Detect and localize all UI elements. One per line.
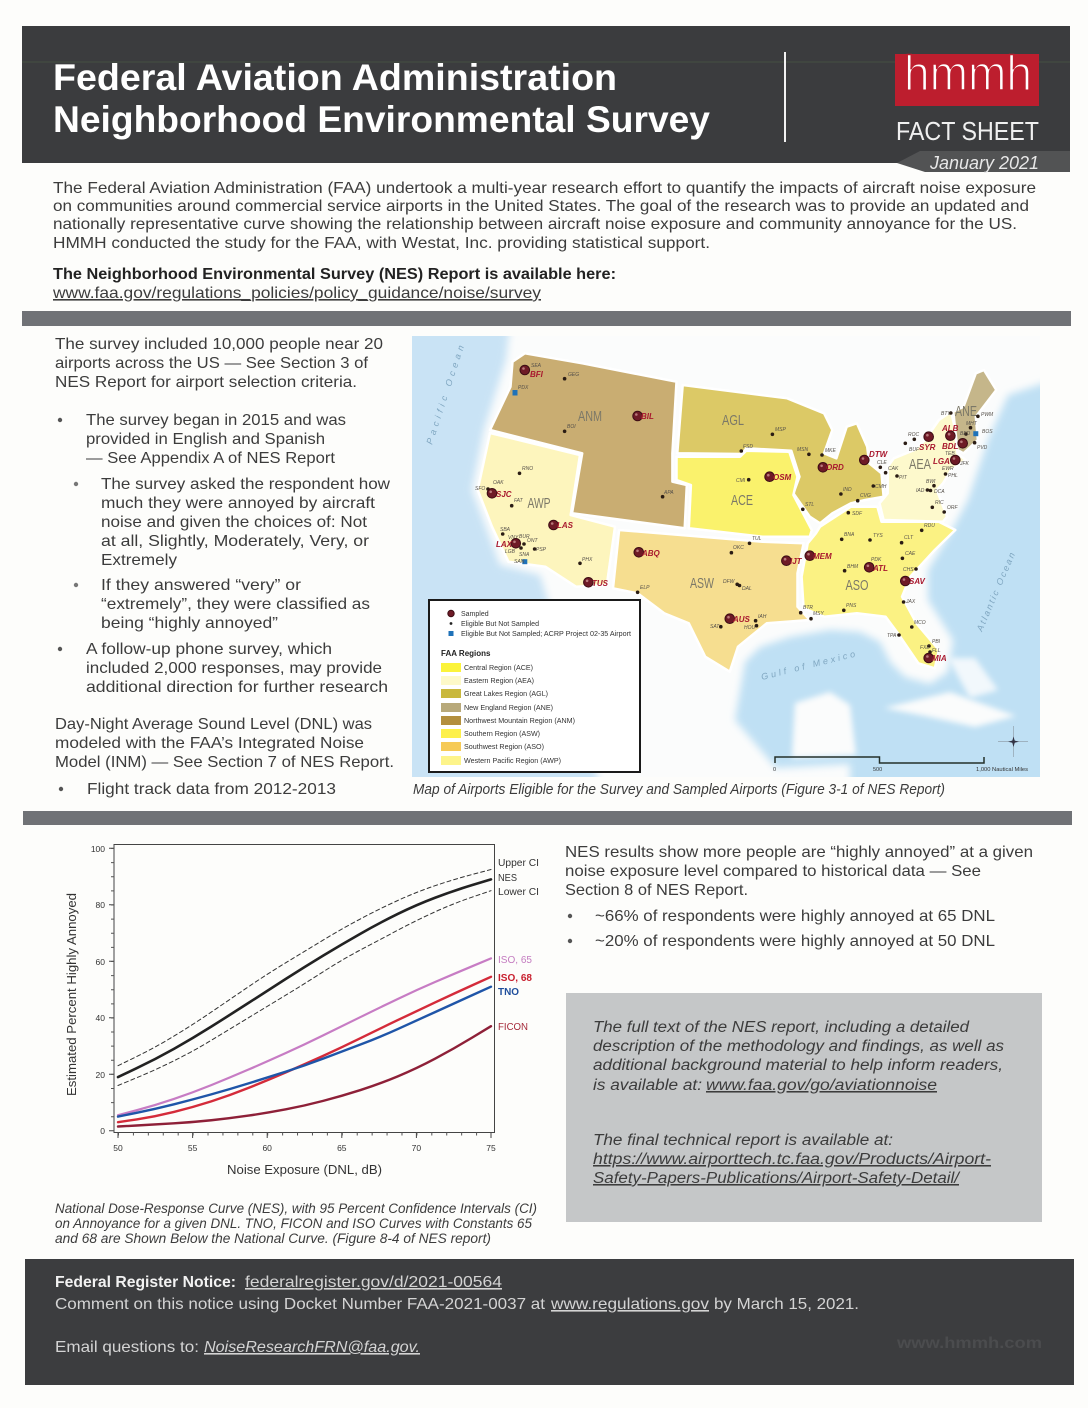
eligible airports: MCO [914, 620, 926, 626]
chart axes: 60 [96, 957, 105, 967]
legend: airport symbols: Eligible But Not Sampled; ACRP Project 02-35 Airport [461, 631, 631, 638]
region labels: ACE [731, 492, 753, 509]
eligible airports: EWR [942, 466, 954, 472]
panel: report links: The full text of the NES report, including a detailed [593, 1019, 970, 1036]
eligible airports: FLL [932, 648, 941, 654]
eligible airports: RDU [924, 523, 935, 529]
eligible airports: IND [843, 487, 852, 493]
curve labels: FICON [498, 1022, 528, 1033]
legend: FAA regions [441, 649, 575, 765]
chart axes: 60 [262, 1143, 272, 1153]
eligible airports: BHM [847, 564, 859, 570]
email contact: NoiseResearchFRN@faa.gov. [204, 1339, 420, 1356]
eligible airports: ROC [908, 432, 920, 438]
ocean labels: Atlantic Ocean [974, 549, 1018, 634]
federal register notice: Federal Register Notice: [55, 1274, 236, 1291]
comment instructions [55, 1296, 859, 1313]
eligible airports: MSY [813, 611, 824, 617]
region labels: ASO [846, 577, 868, 594]
eligible airports: FAT [514, 498, 524, 504]
sampled airports: LAX [496, 540, 513, 549]
curve: TNO [118, 987, 491, 1117]
panel: report links: description of the methodology and findings, as well as [593, 1038, 1004, 1055]
sampled airports: OSM [773, 473, 792, 482]
survey description text: — See Appendix A of NES Report [86, 450, 336, 467]
curve labels: TNO [498, 987, 519, 998]
sampled airports: SYR [919, 443, 936, 452]
legend: FAA regions: Northwest Mountain Region (ANM) [464, 718, 575, 725]
x-axis title: Noise Exposure (DNL, dB) [227, 1163, 382, 1177]
header banner [22, 26, 1070, 173]
chart axes [91, 844, 496, 1153]
date tab [897, 151, 1070, 173]
sampled airports: MIA [932, 654, 947, 663]
ocean areas [400, 326, 1060, 787]
chart axes: 75 [486, 1143, 496, 1153]
FAA regions [478, 353, 996, 672]
chart axes: 70 [412, 1143, 421, 1153]
sampled airports [487, 365, 968, 663]
survey description text: at all, Slightly, Moderately, Very, or [101, 533, 370, 550]
scale bar: 1,000 Nautical Miles [976, 767, 1028, 773]
eligible airports: TUL [752, 536, 762, 542]
sampled airports: BFI [530, 370, 544, 379]
intro paragraph: nationally representative curve showing the relationship between aircraft noise exposure and community annoyance for the US. [53, 216, 1017, 233]
survey description text: A follow-up phone survey, which [86, 641, 332, 658]
eligible airports: BOS [982, 429, 993, 435]
intro paragraph: on communities around commercial service airports in the United States. The goal of the research was to provide an updated and [53, 198, 1029, 215]
eligible airports: ELP [640, 585, 650, 591]
curve: upper CI [118, 870, 491, 1066]
intro paragraph: The Federal Aviation Administration (FAA) undertook a multi-year research effort to quantify the impacts of aircraft noise exposure [53, 180, 1036, 197]
eligible airports: PWM [981, 412, 994, 418]
legend: airport symbols: Sampled [461, 611, 489, 618]
legend: FAA regions: Southwest Region (ASO) [464, 744, 544, 751]
eligible airports: BUR [519, 534, 530, 540]
eligible airports: MKE [825, 448, 836, 454]
eligible airports: DCA [934, 489, 945, 495]
chart axes: 40 [96, 1013, 105, 1023]
eligible airports: CLT [904, 535, 914, 541]
eligible airports: IAH [758, 614, 767, 620]
sampled airports: LGA [933, 457, 950, 466]
chart caption: and 68 are Shown Below the National Curve. (Figure 8-4 of NES report) [55, 1231, 491, 1246]
curve: lower CI [118, 891, 491, 1086]
eligible airports: FSD [743, 444, 753, 450]
survey description text: The survey asked the respondent how [101, 476, 390, 493]
website watermark: www.hmmh.com [896, 1335, 1042, 1352]
eligible airports: PIT [899, 475, 908, 481]
NES results text: ~20% of respondents were highly annoyed at 50 DNL [595, 933, 995, 950]
chart axes: 50 [113, 1143, 123, 1153]
eligible airports: PDX [518, 385, 529, 391]
survey description text: Flight track data from 2012-2013 [87, 781, 336, 798]
survey description text: NES Report for airport selection criteria. [55, 374, 357, 391]
legend: airport symbols [448, 610, 631, 638]
panel: report links: https://www.airporttech.tc.faa.gov/Products/Airport- [593, 1151, 991, 1168]
eligible airports: MHT [966, 421, 978, 427]
federal register notice: federalregister.gov/d/2021-00564 [245, 1274, 502, 1291]
eligible airports: TYS [873, 533, 883, 539]
eligible airports: ONT [527, 538, 538, 544]
map legend [429, 600, 640, 772]
eligible airports: SFO [475, 486, 485, 492]
curve: NES [118, 879, 491, 1077]
scale bar: 500 [873, 767, 882, 773]
chart axes: 0 [100, 1126, 105, 1136]
chart axes: 100 [91, 844, 105, 854]
chart axes: 65 [337, 1143, 347, 1153]
eligible airports: SNA [519, 552, 530, 558]
survey description text: modeled with the FAA’s Integrated Noise [55, 735, 364, 752]
curve labels [498, 858, 539, 1033]
survey description text: The survey included 10,000 people near 20 [55, 336, 383, 353]
curve: ISO 68 [118, 977, 491, 1122]
region labels: AEA [909, 456, 931, 473]
map caption: Map of Airports Eligible for the Survey and Sampled Airports (Figure 3-1 of NES Report) [413, 782, 945, 798]
eligible airports: SBA [500, 527, 511, 533]
chart axes: 55 [188, 1143, 198, 1153]
survey description text: airports across the US — See Section 3 of [55, 355, 369, 372]
legend: FAA regions: New England Region (ANE) [464, 705, 553, 712]
legend: FAA regions: FAA Regions [441, 649, 491, 658]
survey description text: Model (INM) — See Section 7 of NES Report. [55, 754, 394, 771]
eligible airports: SEA [531, 363, 542, 369]
eligible airports: PSP [536, 547, 547, 553]
eligible airports: OKC [733, 545, 744, 551]
ocean labels [424, 340, 1018, 682]
survey description text: Day-Night Average Sound Level (DNL) was [55, 716, 372, 733]
ocean labels: Pacific Ocean [424, 340, 467, 446]
region labels: AWP [528, 495, 550, 512]
airport map [400, 326, 1060, 787]
chart caption: National Dose-Response Curve (NES), with 95 Percent Confidence Intervals (CI) [55, 1201, 537, 1216]
survey description text: additional direction for further research [86, 679, 388, 696]
eligible airports: CHS [903, 567, 914, 573]
email contact [55, 1339, 420, 1356]
eligible airports: PBI [932, 639, 941, 645]
sampled airports: TUS [592, 579, 609, 588]
sampled airports: MEM [813, 552, 832, 561]
legend: FAA regions: Central Region (ACE) [464, 665, 533, 672]
curve labels: ISO, 65 [498, 955, 532, 966]
report availability note: The Neighborhood Environmental Survey (NES) Report is available here: [53, 266, 616, 283]
panel: report links: www.faa.gov/go/aviationnoise [706, 1077, 937, 1094]
NES results text: Section 8 of NES Report. [565, 882, 748, 899]
region labels [528, 403, 977, 594]
scale bar: 0 [773, 767, 776, 773]
sampled airports: BIL [641, 412, 654, 421]
eligible airports: FXE [920, 645, 930, 651]
y-axis title: Estimated Percent Highly Annoyed [65, 893, 79, 1096]
curve labels: Lower CI [498, 887, 539, 898]
NES results text: noise exposure level compared to historical data — See [565, 863, 981, 880]
eligible airports: MSN [797, 447, 808, 453]
panel: report links: is available at: [593, 1077, 702, 1094]
legend: FAA regions: Eastern Region (AEA) [464, 678, 534, 685]
eligible airports: CAE [905, 551, 916, 557]
compass [998, 726, 1028, 757]
region labels: ASW [690, 575, 715, 592]
comment instructions: www.regulations.gov [550, 1296, 709, 1313]
NES results text: NES results show more people are “highly annoyed” at a given [565, 844, 1033, 861]
survey description text: “extremely”, they were classified as [101, 596, 370, 613]
sampled airports: AUS [732, 615, 751, 624]
eligible airports: PNS [846, 603, 857, 609]
sampled airports: LAS [557, 521, 574, 530]
eligible airports: PVD [977, 445, 988, 451]
survey description text: If they answered “very” or [101, 577, 302, 594]
comment instructions: Comment on this notice using Docket Number FAA-2021-0037 at [55, 1296, 546, 1313]
eligible airports: PHL [948, 473, 958, 479]
eligible airports: BWI [926, 479, 936, 485]
eligible airports: CVG [860, 493, 871, 499]
eligible airports: MSP [775, 427, 786, 433]
eligible airports: BOI [567, 424, 576, 430]
sampled airports: SJC [496, 490, 512, 499]
sampled airports: ATL [872, 564, 888, 573]
eligible airports: JAX [905, 599, 916, 605]
panel: report links [566, 993, 1042, 1222]
survey description text [55, 336, 394, 798]
eligible airports: TPA [887, 633, 897, 639]
eligible airports: CAK [888, 466, 899, 472]
chart caption: on Annoyance for a given DNL. TNO, FICON and ISO Curves with Constants 65 [55, 1216, 532, 1231]
ocean labels: Gulf of Mexico [760, 648, 859, 682]
sampled airports: IJT [790, 557, 803, 566]
fact sheet label: FACT SHEET [896, 116, 1039, 146]
logo: hmmh: hmmh [904, 47, 1032, 101]
sampled airports: DTW [869, 450, 889, 459]
eligible airports: RNO [522, 466, 533, 472]
chart axes: 20 [96, 1070, 105, 1080]
eligible airports: DAL [742, 586, 752, 592]
line chart: dose-response curves [65, 844, 539, 1177]
eligible airports: BNA [844, 532, 855, 538]
eligible airports: APA [663, 490, 674, 496]
survey description text: included 2,000 responses, may provide [86, 660, 382, 677]
eligible airports: SDF [852, 511, 863, 517]
survey description text: noise and given the choices of: Not [101, 514, 368, 531]
eligible airports: BUF [909, 447, 920, 453]
eligible airports: RIC [935, 500, 944, 506]
sampled airports: BDL [942, 442, 959, 451]
scale bar [773, 757, 1028, 773]
eligible airports: ORF [947, 505, 958, 511]
title [53, 57, 710, 140]
sampled airports: ABQ [641, 549, 661, 558]
survey description text: being “highly annoyed” [101, 615, 278, 632]
eligible airports: PHX [582, 557, 593, 563]
curve: ISO 65 [118, 958, 491, 1115]
comment instructions: by March 15, 2021. [714, 1296, 859, 1313]
sampled airports: ORD [826, 463, 844, 472]
eligible airports: BTV [941, 411, 951, 417]
eligible airports: BED [960, 431, 971, 437]
survey description text: much they were annoyed by aircraft [101, 495, 376, 512]
eligible airports: CMH [875, 484, 887, 490]
curve labels: Upper CI [498, 858, 539, 869]
federal register notice [55, 1274, 502, 1291]
eligible airports: OAK [493, 480, 504, 486]
survey description text: provided in English and Spanish [86, 431, 325, 448]
eligible airports: SAT [710, 624, 720, 630]
title: Federal Aviation Administration [53, 57, 617, 98]
eligible airports: TEB [945, 451, 955, 457]
chart axes: 80 [96, 900, 105, 910]
intro paragraph [53, 180, 1036, 252]
sampled airports: SAV [909, 577, 926, 586]
footer banner [25, 1259, 1074, 1385]
eligible airports: CLE [877, 460, 887, 466]
sampled airports: ALB [941, 424, 959, 433]
eligible airports: HOU [744, 625, 756, 631]
curve labels: NES [498, 873, 517, 884]
legend: FAA regions: Great Lakes Region (AGL) [464, 691, 548, 698]
legend: airport symbols: Eligible But Not Sampled [461, 621, 539, 628]
title: Neighborhood Environmental Survey [53, 99, 710, 140]
chart caption [55, 1201, 537, 1246]
legend: FAA regions: Southern Region (ASW) [464, 731, 540, 738]
panel: report links: additional background material to help inform readers, [593, 1057, 1003, 1074]
region labels: AGL [722, 412, 744, 429]
eligible airports: JFK [959, 461, 970, 467]
eligible airports: SAN [514, 559, 525, 565]
survey description text: The survey began in 2015 and was [86, 412, 346, 429]
NES results text: ~66% of respondents were highly annoyed at 65 DNL [595, 908, 995, 925]
legend: FAA regions: Western Pacific Region (AWP) [464, 758, 561, 765]
region labels: ANE [955, 403, 977, 420]
panel: report links: Safety-Papers-Publications/Airport-Safety-Detail/ [593, 1170, 961, 1187]
survey description text: Extremely [101, 552, 177, 569]
eligible airports: PDK [871, 557, 882, 563]
intro paragraph: HMMH conducted the study for the FAA, with Westat, Inc. providing statistical support. [53, 235, 710, 252]
eligible airports: STL [805, 502, 814, 508]
curve: FICON [118, 1026, 491, 1126]
panel: report links: The final technical report is available at: [593, 1132, 893, 1149]
eligible airports: IAD [916, 488, 925, 494]
email contact: Email questions to: [55, 1339, 199, 1356]
eligible airports: LGB [505, 549, 516, 555]
eligible airports [475, 363, 994, 654]
report availability note: www.faa.gov/regulations_policies/policy_guidance/noise/survey [52, 285, 541, 302]
region labels: ANM [578, 408, 602, 425]
NES results text [565, 844, 1033, 950]
eligible airports: GEG [568, 372, 579, 378]
eligible airports: CMI [736, 478, 746, 484]
curve labels: ISO, 68 [498, 973, 532, 984]
date tab: January 2021 [929, 153, 1039, 173]
report availability note [52, 266, 616, 302]
eligible airports: DFW [723, 579, 736, 585]
eligible airports: VNY [508, 535, 519, 541]
eligible airports: BTR [803, 605, 813, 611]
